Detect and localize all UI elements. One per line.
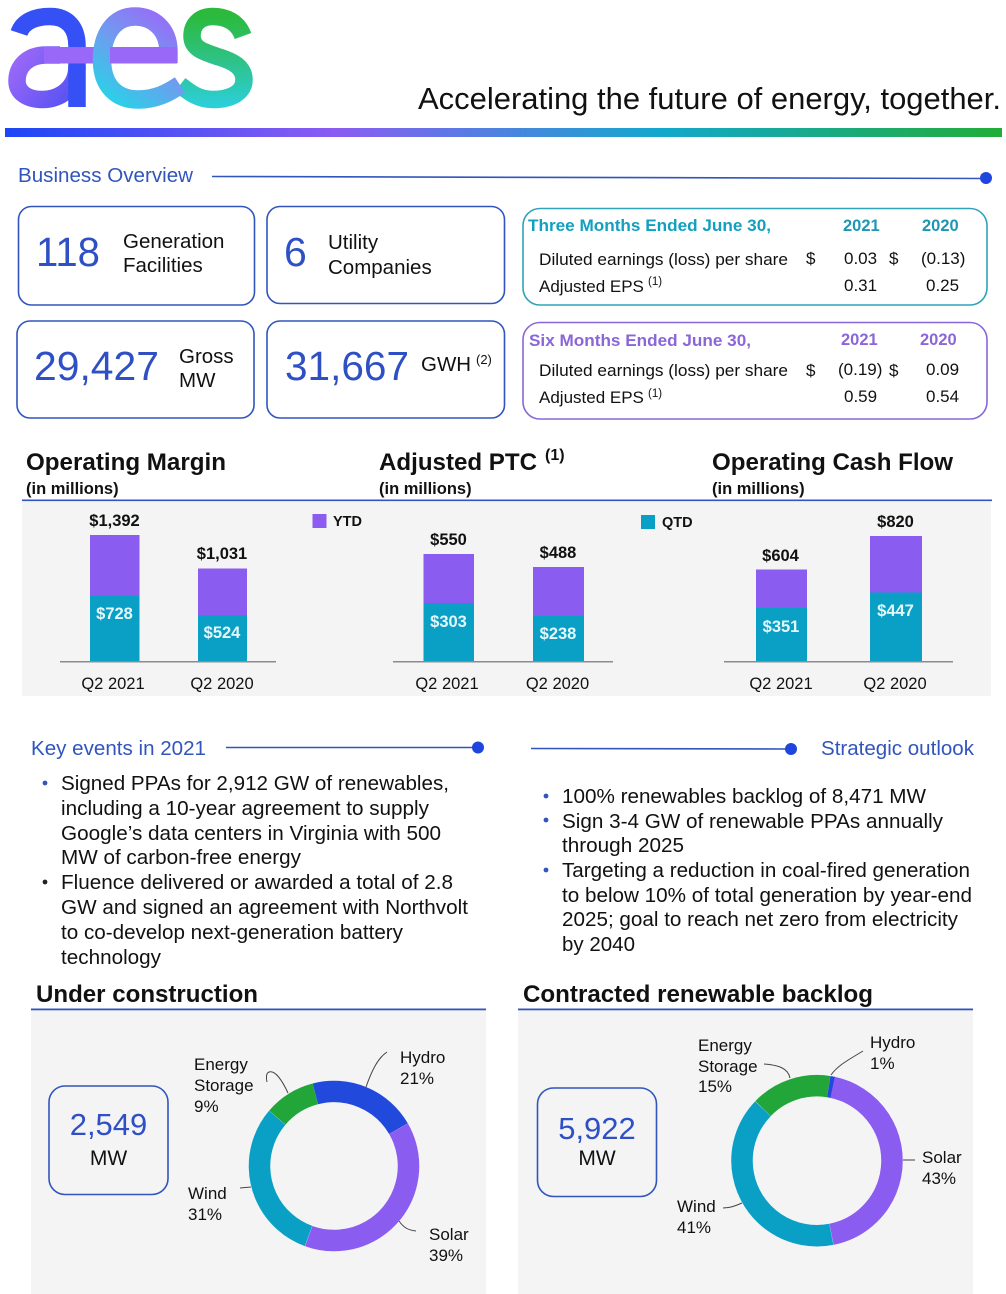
panel: under construction: 21%: [400, 1069, 434, 1088]
table: six months: [523, 322, 987, 419]
chart: adjusted PTC: $550: [430, 531, 467, 549]
chart: operating cash flow: Operating Cash Flow: [712, 449, 953, 476]
heading: strategic outlook: Strategic outlook: [821, 737, 975, 760]
table: six months: 2020: [920, 331, 957, 349]
table: six months: 0.54: [926, 387, 959, 406]
table: six months: (1): [648, 388, 662, 400]
chart: operating cash flow: Q2 2020: [863, 675, 927, 693]
table: six months: 0.09: [926, 360, 959, 379]
panel: contracted renewable backlog: 1%: [870, 1054, 895, 1073]
heading: business overview: [18, 164, 992, 187]
panel: under construction: MW: [90, 1147, 127, 1170]
text block: strategic outlook bullets: Targeting a reduction in coal-fired generation: [562, 859, 970, 882]
stat card: utility companies: Utility: [328, 231, 379, 254]
header gradient bar: [5, 128, 1002, 137]
text block: key events bullets: Fluence delivered or awarded a total of 2.8: [61, 871, 453, 894]
table: three months: 0.25: [926, 276, 959, 295]
panel: contracted renewable backlog: Energy: [698, 1036, 752, 1055]
chart: adjusted PTC: Adjusted PTC: [379, 449, 537, 476]
stat card: gross MW: MW: [179, 369, 216, 392]
panel: contracted renewable backlog: Solar: [922, 1148, 962, 1167]
stat card: generation facilities: Facilities: [123, 254, 203, 277]
chart: adjusted PTC: (1): [545, 447, 565, 464]
stat card: generation facilities: 118: [36, 229, 100, 275]
table: three months: (0.13): [921, 249, 965, 268]
table: three months: 0.03: [844, 249, 877, 268]
panel: contracted renewable backlog: [518, 981, 973, 1294]
stat card: GWH: (2): [476, 352, 492, 367]
panel: contracted renewable backlog: 15%: [698, 1077, 732, 1096]
chart: adjusted PTC: $303: [430, 613, 467, 631]
chart: adjusted PTC: $488: [540, 544, 576, 562]
chart: operating margin: $524: [204, 624, 241, 642]
legend: QTD: QTD: [662, 515, 693, 531]
text block: strategic outlook bullets: to below 10% of total generation by year-end: [562, 884, 972, 907]
chart: operating cash flow: [712, 449, 953, 693]
chart: operating cash flow: $604: [762, 547, 800, 565]
panel: under construction: Solar: [429, 1225, 469, 1244]
text block: strategic outlook bullets: Sign 3-4 GW of renewable PPAs annually: [562, 810, 944, 833]
chart: operating margin: Operating Margin: [26, 449, 226, 476]
heading: key events: Key events in 2021: [31, 737, 206, 760]
donut: contracted renewable backlog: [711, 1055, 923, 1267]
panel: under construction: Energy: [194, 1055, 248, 1074]
chart: operating cash flow: $820: [877, 513, 914, 531]
table: three months: Diluted earnings (loss) per share: [539, 250, 788, 269]
text block: strategic outlook bullets: through 2025: [562, 834, 684, 857]
stat card: utility companies: Companies: [328, 256, 432, 279]
panel: contracted renewable backlog: 41%: [677, 1218, 711, 1237]
text block: strategic outlook bullets: 2025; goal to reach net zero from electricity: [562, 908, 959, 931]
stat card: GWH: GWH: [421, 353, 471, 376]
text block: key events bullets: to co-develop next-generation battery: [61, 921, 404, 944]
panel: under construction: Wind: [188, 1184, 227, 1203]
chart: adjusted PTC: $238: [540, 625, 576, 643]
table: three months: 2020: [922, 217, 959, 235]
table: three months: 0.31: [844, 276, 877, 295]
table: three months: Adjusted EPS: [539, 277, 644, 296]
text block: strategic outlook bullets: by 2040: [562, 933, 635, 956]
panel: under construction: [31, 981, 486, 1294]
table: three months: [523, 208, 987, 305]
chart: operating margin: Q2 2020: [190, 675, 254, 693]
tagline: Accelerating the future of energy, together.: [418, 81, 1001, 116]
table: six months: 0.59: [844, 387, 877, 406]
table: three months: $: [806, 249, 816, 268]
text block: strategic outlook bullets: [544, 785, 972, 956]
chart: operating margin: [26, 449, 276, 693]
text block: key events bullets: technology: [61, 946, 162, 969]
panel: under construction: 2,549: [70, 1107, 147, 1142]
text block: key events bullets: GW and signed an agreement with Northvolt: [61, 896, 468, 919]
chart: adjusted PTC: (in millions): [379, 480, 472, 498]
chart: adjusted PTC: Q2 2020: [526, 675, 589, 693]
panel: charts background: [22, 501, 991, 696]
panel: contracted renewable backlog: MW: [578, 1147, 616, 1170]
chart: operating margin: $1,031: [197, 545, 247, 563]
text block: key events bullets: MW of carbon-free energy: [61, 846, 302, 869]
stat card: utility companies: [267, 206, 504, 304]
table: three months: Three Months Ended June 30,: [528, 217, 771, 235]
logo: aes: [17, 16, 244, 107]
chart: operating cash flow: $447: [877, 602, 914, 620]
stat card: GWH: 31,667: [285, 343, 409, 389]
chart: operating cash flow: $351: [763, 618, 799, 636]
table: three months: 2021: [843, 217, 880, 235]
heading: key events: [31, 737, 484, 760]
table: three months: (1): [648, 276, 662, 288]
panel: under construction: 31%: [188, 1205, 222, 1224]
stat card: gross MW: Gross: [179, 345, 234, 368]
stat card: GWH: [267, 321, 504, 418]
panel: under construction: 9%: [194, 1097, 219, 1116]
table: six months: Diluted earnings (loss) per share: [539, 361, 788, 380]
charts top rule: [22, 500, 992, 501]
chart: adjusted PTC: [379, 447, 613, 693]
stat card: generation facilities: Generation: [123, 230, 224, 253]
panel: contracted renewable backlog: Hydro: [870, 1033, 915, 1052]
chart: operating margin: (in millions): [26, 480, 119, 498]
panel: under construction: Under construction: [36, 981, 258, 1008]
text block: strategic outlook bullets: 100% renewables backlog of 8,471 MW: [562, 785, 927, 808]
panel: contracted renewable backlog: Wind: [677, 1197, 716, 1216]
legend: QTD: [641, 515, 693, 531]
text block: key events bullets: Signed PPAs for 2,912 GW of renewables,: [61, 772, 449, 795]
table: three months: $: [889, 249, 899, 268]
stat card: gross MW: [17, 321, 254, 418]
text block: key events bullets: [43, 772, 468, 969]
table: six months: Adjusted EPS: [539, 388, 644, 407]
chart: operating margin: $1,392: [89, 512, 140, 530]
panel: under construction: Storage: [194, 1076, 254, 1095]
chart: operating cash flow: Q2 2021: [749, 675, 813, 693]
chart: operating cash flow: (in millions): [712, 480, 805, 498]
table: six months: Six Months Ended June 30,: [529, 332, 751, 350]
chart: operating margin: Q2 2021: [81, 675, 145, 693]
table: six months: 2021: [841, 331, 878, 349]
panel: under construction: 39%: [429, 1246, 463, 1265]
heading: strategic outlook: [531, 737, 975, 760]
table: six months: $: [806, 361, 816, 380]
heading: business overview: Business Overview: [18, 164, 193, 187]
donut: under construction: [229, 1061, 439, 1271]
stat card: generation facilities: [18, 206, 254, 305]
text block: key events bullets: including a 10-year agreement to supply: [61, 797, 430, 820]
table: six months: (0.19): [838, 360, 882, 379]
panel: contracted renewable backlog: Contracted renewable backlog: [523, 981, 873, 1008]
text block: key events bullets: Google’s data centers in Virginia with 500: [61, 822, 441, 845]
legend: YTD: [312, 514, 362, 530]
stat card: utility companies: 6: [284, 229, 307, 275]
panel: contracted renewable backlog: 43%: [922, 1169, 956, 1188]
panel: contracted renewable backlog: Storage: [698, 1057, 758, 1076]
chart: adjusted PTC: Q2 2021: [415, 675, 479, 693]
panel: under construction: Hydro: [400, 1048, 445, 1067]
panel: contracted renewable backlog: 5,922: [558, 1111, 636, 1146]
chart: operating margin: $728: [96, 605, 133, 623]
legend: YTD: YTD: [333, 514, 362, 530]
stat card: gross MW: 29,427: [34, 343, 159, 389]
table: six months: $: [889, 361, 899, 380]
